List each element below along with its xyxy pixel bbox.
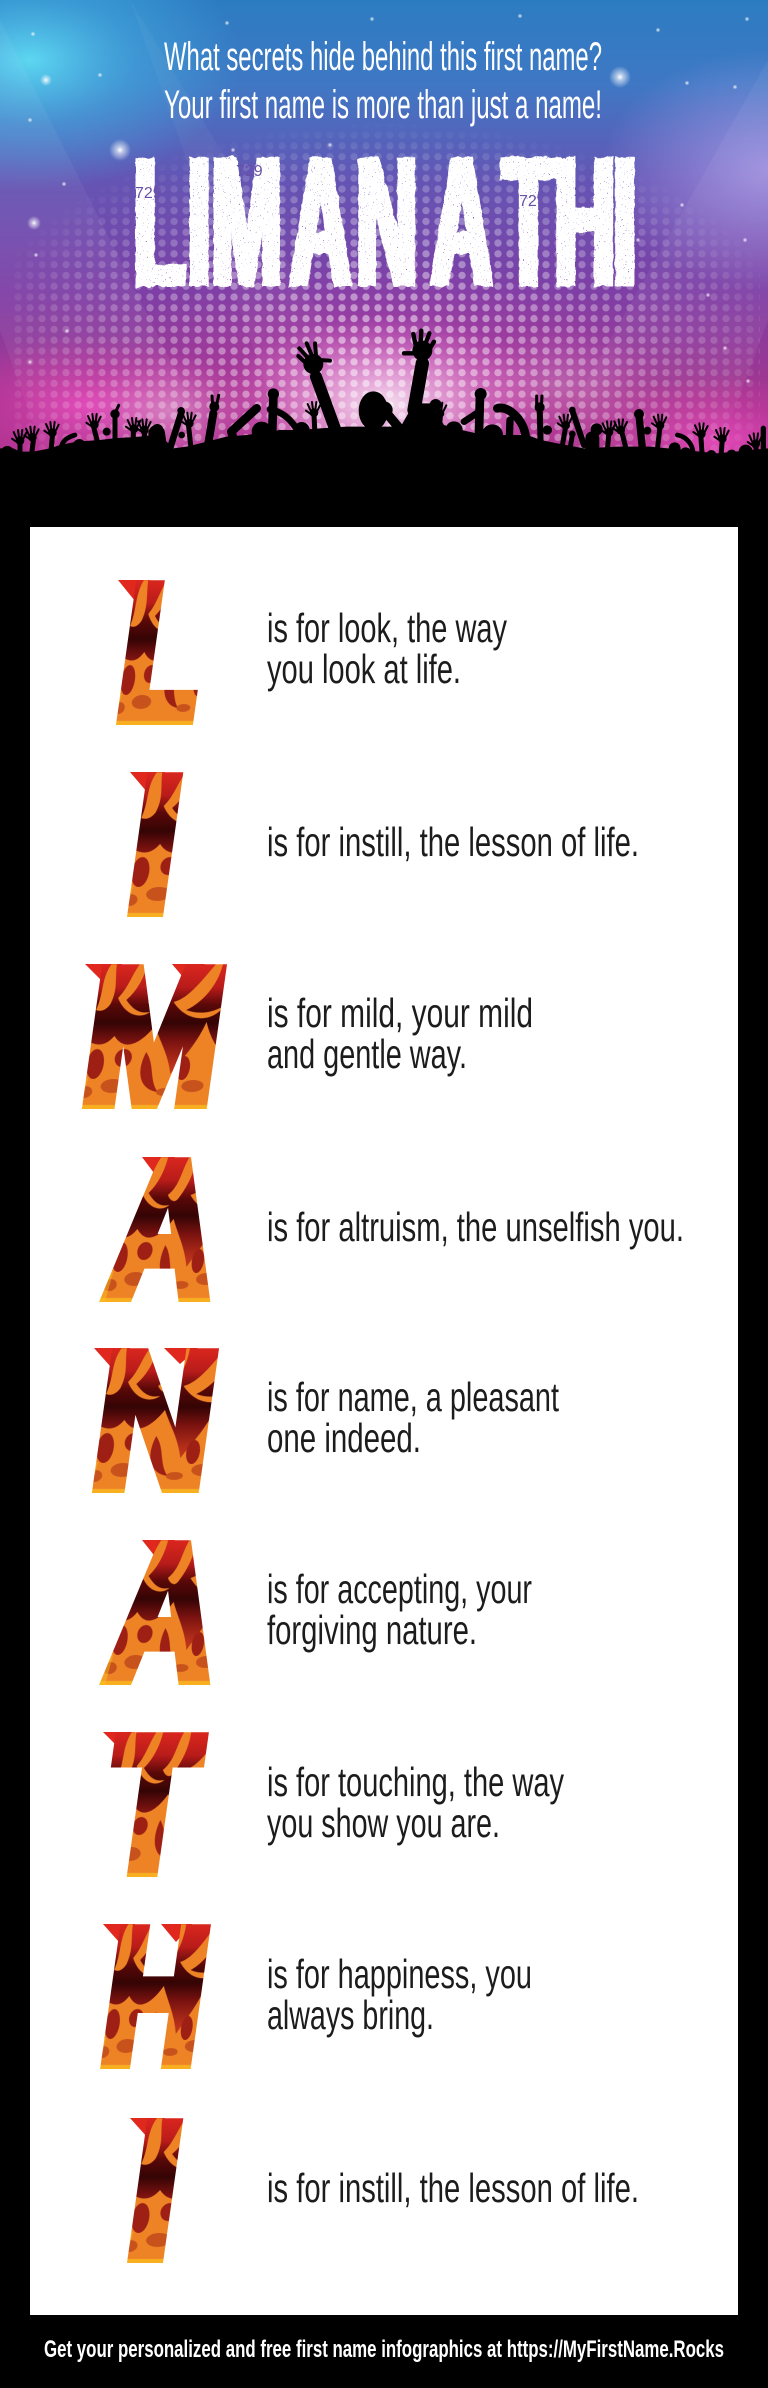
row: I [117, 738, 639, 950]
headline [164, 35, 602, 127]
text: L meaning: you look at life. [267, 646, 461, 692]
text: L meaning [267, 605, 507, 692]
name title: M [211, 118, 282, 325]
panel: concert header [0, 0, 768, 454]
text: H meaning [267, 1951, 532, 2038]
flame letter A: A [98, 1123, 232, 1335]
crowd left half [0, 343, 388, 510]
name title [133, 118, 637, 325]
text: H meaning: always bring. [267, 1992, 434, 2038]
stage background [0, 0, 768, 527]
row: A [98, 1123, 684, 1335]
text: N meaning: one indeed. [267, 1415, 421, 1461]
row: I second [117, 2084, 639, 2296]
text: T meaning: you show you are. [267, 1800, 500, 1846]
row: H [91, 1891, 532, 2103]
text: M meaning [267, 990, 533, 1077]
text: A meaning [267, 1566, 532, 1653]
row: L [107, 546, 507, 758]
flame letter H: H [91, 1891, 220, 2103]
text: M meaning: is for mild, your mild [267, 990, 533, 1036]
flame letter A: A [98, 1506, 232, 1718]
flame letter I: I [117, 2084, 193, 2296]
flame letter L: L [107, 546, 217, 758]
name title: 72 [519, 193, 537, 210]
name title: A [290, 118, 351, 325]
row: M [72, 930, 533, 1143]
row: T [94, 1698, 564, 1911]
LED dot wall [14, 134, 760, 452]
crowd silhouette [0, 331, 768, 527]
crowd right half [375, 331, 768, 510]
name title: A [431, 118, 492, 325]
text: N meaning: is for name, a pleasant [267, 1374, 559, 1420]
text: A meaning: is for accepting, your [267, 1566, 532, 1612]
name title: L [133, 118, 185, 325]
name title: T [503, 118, 554, 325]
row: N [82, 1314, 559, 1527]
text: L meaning: is for look, the way [267, 605, 507, 651]
flame letter M: M [72, 930, 237, 1143]
name title: N [356, 118, 417, 325]
row: A second [98, 1506, 532, 1718]
name title: 729 [236, 163, 263, 180]
name title: H [554, 118, 615, 325]
flame letter T: T [94, 1698, 210, 1911]
name title: 729 [135, 185, 162, 202]
text: H meaning: is for happiness, you [267, 1951, 532, 1997]
sparkles [27, 14, 750, 384]
text: A meaning: forgiving nature. [267, 1607, 477, 1653]
flame letter N: N [82, 1314, 229, 1527]
text: N meaning [267, 1374, 559, 1461]
panel: white letter list [30, 527, 738, 2315]
text: M meaning: and gentle way. [267, 1031, 467, 1077]
name title: I [613, 118, 637, 325]
text: T meaning [267, 1759, 564, 1846]
name title: I [187, 118, 211, 325]
flame letter I: I [117, 738, 193, 950]
black floor [0, 460, 768, 527]
text: T meaning: is for touching, the way [267, 1759, 564, 1805]
